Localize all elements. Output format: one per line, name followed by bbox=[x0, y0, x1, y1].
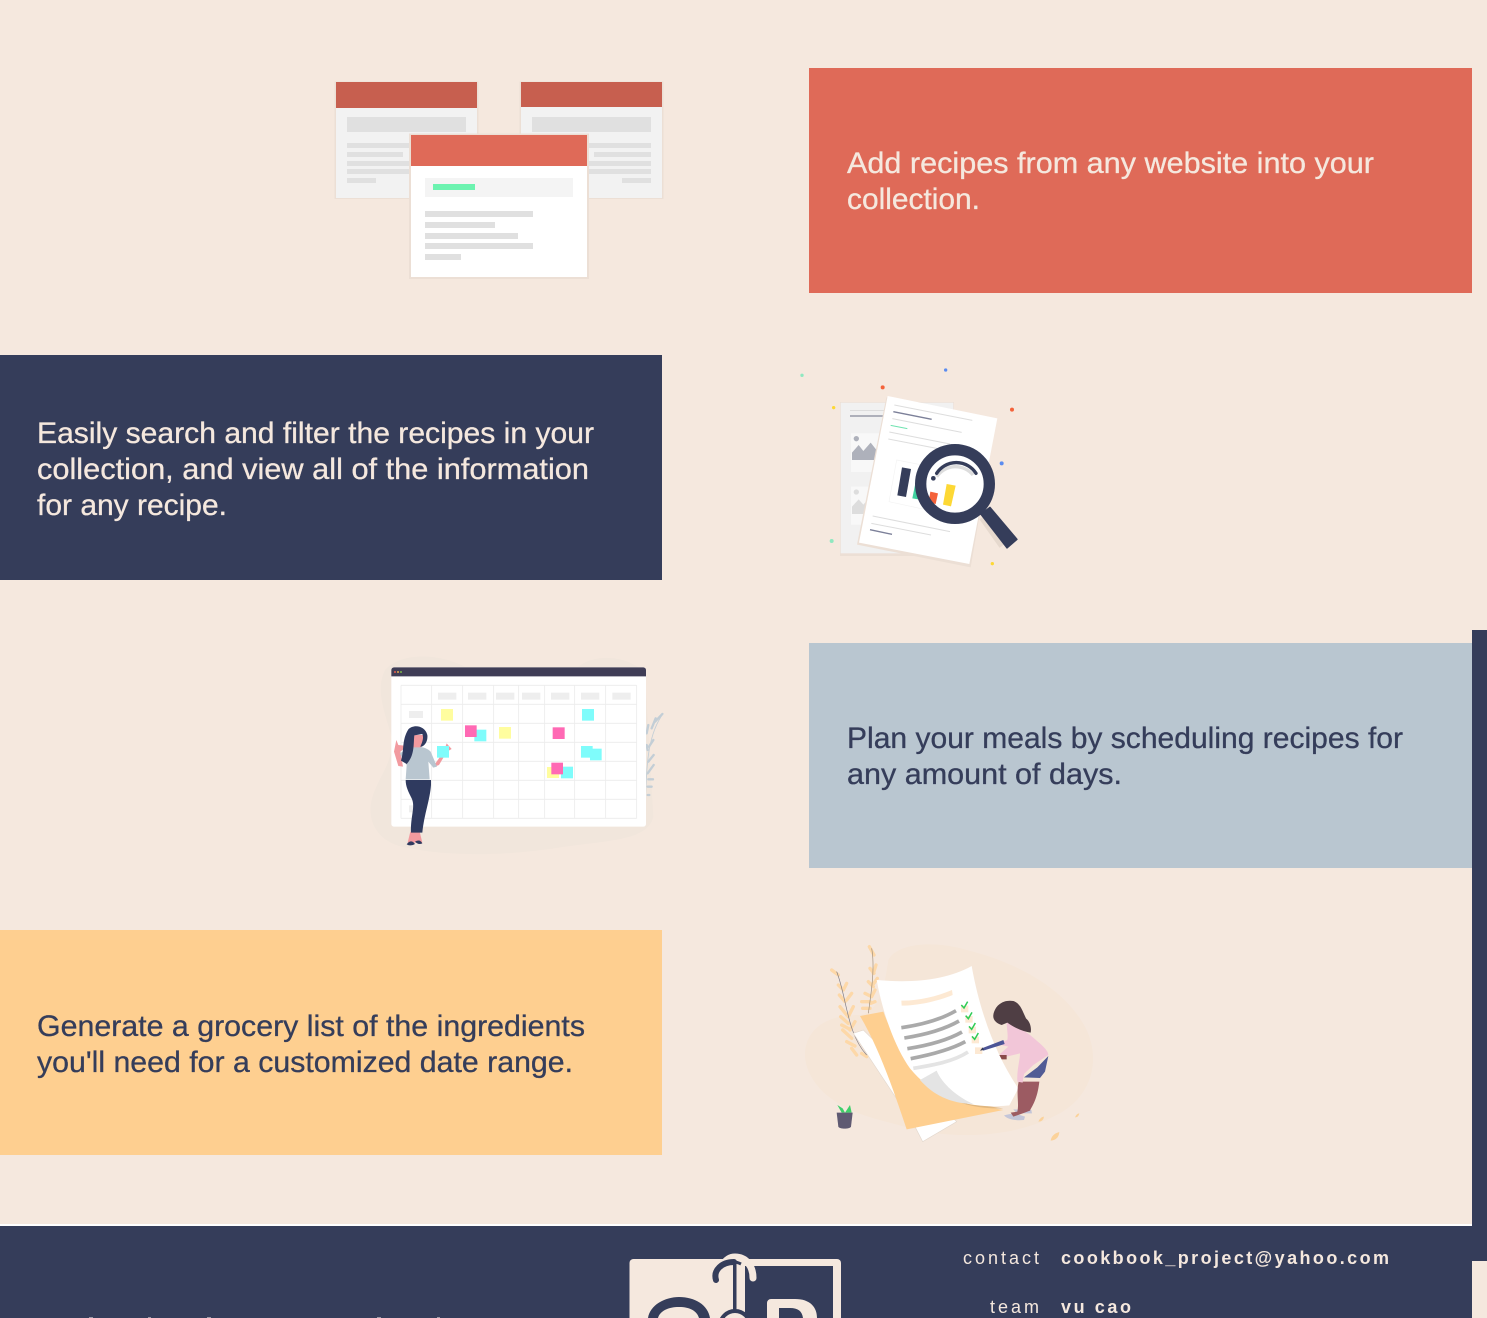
contact details bbox=[963, 1248, 1389, 1317]
front card bbox=[409, 134, 589, 279]
panel: add recipes bbox=[809, 68, 1472, 293]
right back card bbox=[520, 82, 664, 199]
background blob bbox=[805, 944, 1093, 1135]
contact details: team bbox=[990, 1297, 1039, 1317]
calendar window bbox=[391, 667, 646, 827]
woman bbox=[394, 726, 452, 845]
panel text: grocery list: Generate a grocery list of the ingredients bbox=[37, 1010, 585, 1043]
illustration: magnifier over documents bbox=[800, 368, 1017, 567]
magnifying glass bbox=[921, 450, 1017, 548]
panel: meal planning bbox=[809, 643, 1472, 868]
panel text: add recipes: collection. bbox=[847, 183, 980, 216]
illustration: woman with meal calendar bbox=[370, 656, 663, 854]
left back card bbox=[334, 82, 478, 199]
panel text: meal planning: Plan your meals by scheduling recipes for bbox=[847, 722, 1403, 755]
contact details: contact bbox=[963, 1248, 1039, 1268]
panel: grocery list bbox=[0, 930, 662, 1155]
plant bbox=[646, 713, 663, 795]
scrollbar thumb bbox=[1472, 630, 1487, 1261]
illustration: recipe cards bbox=[334, 82, 664, 279]
footer bbox=[0, 1224, 1472, 1318]
paper sheets bbox=[853, 966, 1018, 1142]
sticky notes bbox=[441, 709, 602, 778]
woman with pen bbox=[980, 1001, 1048, 1120]
confetti bbox=[800, 368, 1014, 565]
illustration: woman checking grocery list bbox=[805, 944, 1093, 1142]
panel text: search and filter: Easily search and filter the recipes in your bbox=[37, 417, 594, 450]
panel text: grocery list: you'll need for a customized date range. bbox=[37, 1046, 573, 1079]
contact details: vu cao bbox=[1061, 1297, 1131, 1317]
back document bbox=[840, 402, 954, 556]
panel: search and filter bbox=[0, 355, 662, 580]
contact details: cookbook_project@yahoo.com bbox=[1061, 1248, 1389, 1268]
front document bbox=[857, 396, 997, 567]
logo bbox=[630, 1257, 841, 1318]
panel text: search and filter: for any recipe. bbox=[37, 489, 227, 522]
falling leaves bbox=[1038, 1113, 1079, 1141]
background blob bbox=[370, 656, 653, 854]
wheat stems bbox=[832, 947, 877, 1057]
panel text: meal planning: any amount of days. bbox=[847, 758, 1122, 791]
panel text: add recipes: Add recipes from any website into your bbox=[847, 147, 1374, 180]
plant pot bbox=[837, 1105, 853, 1129]
panel text: search and filter: collection, and view all of the information bbox=[37, 453, 589, 486]
